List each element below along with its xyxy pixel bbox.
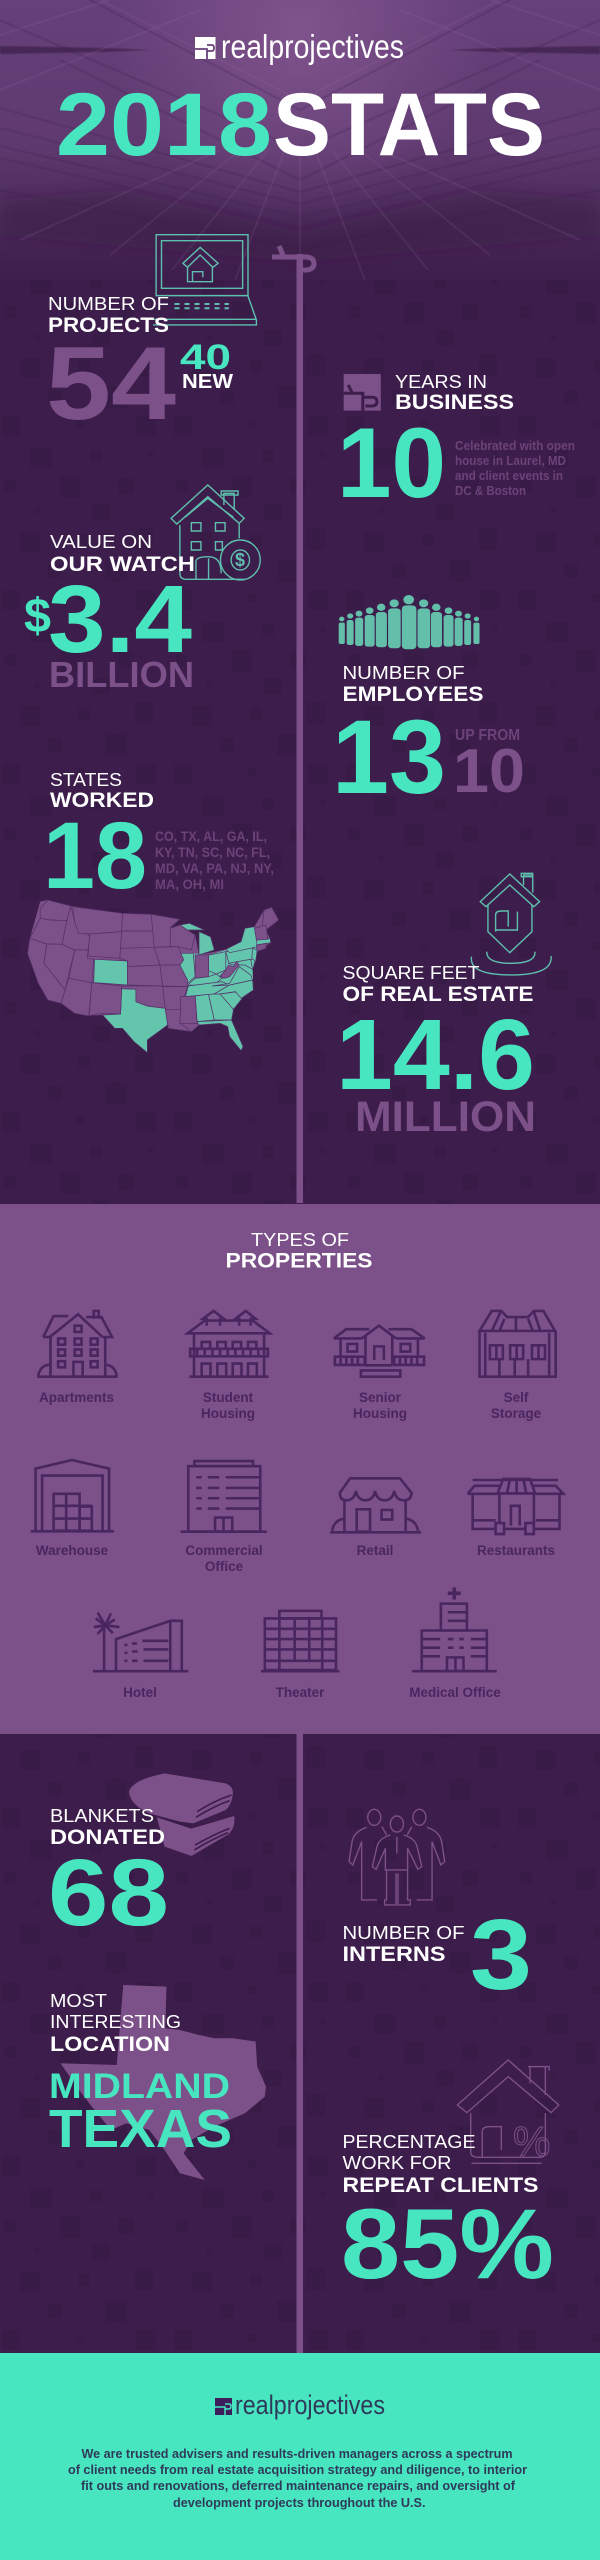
warehouse label: Warehouse [36,1543,109,1558]
title: STATS [273,74,545,174]
dollar sign: $ [24,590,51,643]
footer description: development projects throughout the U.S. [173,2495,426,2510]
hotel label: Hotel [123,1685,157,1700]
footer description [68,2446,527,2510]
description: and client events in [455,469,563,483]
number 3.4: 3.4 [48,566,192,673]
number 13: 13 [332,699,446,816]
number 18: 18 [43,803,147,909]
icon: row of people [339,595,480,649]
icon: student housing [188,1311,270,1377]
icon: laptop with house [153,235,256,325]
label bold: OUR WATCH [50,553,195,576]
self storage label: Self [504,1390,528,1405]
number 54: 54 [46,326,176,442]
label: STATES [50,769,122,790]
icon: house with percent [457,2060,559,2163]
icon: theater [261,1611,339,1671]
icon: warehouse [31,1460,114,1531]
self storage label: Storage [491,1406,542,1421]
number 3: 3 [470,1899,532,2011]
label bold: INTERNS [342,1943,446,1966]
icon: hotel [93,1613,188,1671]
number 14.6: 14.6 [336,999,535,1111]
map: Texas silhouette [60,1985,266,2180]
stat: number of interns [342,1809,532,2011]
label bold: PROJECTS [48,314,169,337]
footer description: We are trusted advisers and results-driven managers across a spectrum [82,2446,512,2461]
dollar glyph in bag: $ [235,550,245,570]
label bold: EMPLOYEES [342,683,484,706]
hero: building photo background [0,0,600,280]
texas: TEXAS [49,2099,232,2159]
student housing label: Housing [201,1406,255,1421]
center divider bar with p mark [272,246,314,2353]
percent glyph: % [513,2118,550,2165]
description: Celebrated with open [455,439,575,453]
stat: most interesting location [49,1985,266,2180]
stat: states worked [28,769,279,1053]
icon: folded blankets [129,1773,234,1856]
label: PERCENTAGE [342,2131,476,2152]
title [56,74,545,174]
icon: senior housing [334,1326,425,1377]
midland: MIDLAND [49,2067,230,2106]
label: WORK FOR [342,2152,452,2173]
footer description: fit outs and renovations, deferred maintenance repairs, and oversight of [81,2478,516,2493]
icon: house with money bag [171,485,260,580]
number 85%: 85% [341,2188,554,2299]
stat: value on our watch [24,485,260,695]
senior housing label: Senior [359,1390,401,1405]
footer logo: realprojectives [235,2390,385,2420]
label: YEARS IN [395,371,487,392]
icon: self storage [480,1311,556,1377]
stat: employees [332,595,525,816]
commercial office label: Commercial [185,1543,263,1558]
icon: retail [330,1478,421,1532]
number 68: 68 [48,1840,169,1946]
label: NUMBER OF [48,293,169,314]
state list: CO, TX, AL, GA, IL, [155,829,267,844]
footer panel [0,2353,600,2560]
state list [155,829,274,892]
logo wordmark: realprojectives [221,28,404,65]
label new: NEW [182,371,233,393]
commercial office label: Office [205,1559,244,1574]
state list: MD, VA, PA, NJ, NY, [155,861,274,876]
label: INTERESTING [50,2011,181,2032]
title: 2018 [56,74,272,174]
billion: BILLION [49,654,194,695]
label bold: WORKED [50,789,154,812]
state list: KY, TN, SC, NC, FL, [155,845,270,860]
million: MILLION [355,1093,536,1141]
restaurants label: Restaurants [477,1543,555,1558]
logo mark [195,37,216,59]
icon: three interns [349,1809,445,1905]
icon: medical office [412,1587,497,1671]
description: house in Laurel, MD [455,454,566,468]
panel: types of properties [0,1204,600,1734]
icon: commercial office [181,1461,267,1532]
stat: number of projects [46,235,256,442]
number 40: 40 [180,338,231,377]
label: NUMBER OF [342,1922,464,1943]
heading bold: PROPERTIES [226,1250,372,1272]
number 10: 10 [337,407,446,518]
stat: square feet of real estate [336,873,551,1141]
stat: repeat clients [341,2060,559,2299]
heading: TYPES OF [251,1229,349,1250]
senior housing label: Housing [353,1406,407,1421]
description: DC & Boston [455,484,526,498]
top logo [195,28,404,65]
label bold: OF REAL ESTATE [342,983,534,1006]
medical office label: Medical Office [409,1685,501,1700]
label: MOST [50,1990,107,2011]
map: US states worked [28,900,279,1053]
description [455,439,575,498]
apartments label: Apartments [39,1390,114,1405]
stat: blankets donated [48,1773,234,1946]
stat: years in business [337,371,575,518]
label bold: DONATED [50,1826,165,1849]
label: NUMBER OF [342,662,464,683]
state list: MA, OH, MI [155,877,224,892]
label bold: REPEAT CLIENTS [342,2174,538,2197]
label: VALUE ON [50,531,152,552]
label bold: BUSINESS [395,391,514,414]
icon: logo square [344,374,381,411]
student housing label: Student [203,1390,253,1405]
footer description: of client needs from real estate acquisition strategy and diligence, to interior [68,2462,527,2477]
icon: restaurants [468,1479,563,1534]
up from: UP FROM [455,727,520,744]
label: SQUARE FEET [342,962,480,983]
theater label: Theater [276,1685,325,1700]
label: BLANKETS [50,1805,154,1826]
retail label: Retail [357,1543,393,1558]
number 10: 10 [453,737,525,806]
icon: apartments [37,1311,117,1377]
icon: house pin [471,873,551,975]
label bold: LOCATION [50,2033,170,2056]
